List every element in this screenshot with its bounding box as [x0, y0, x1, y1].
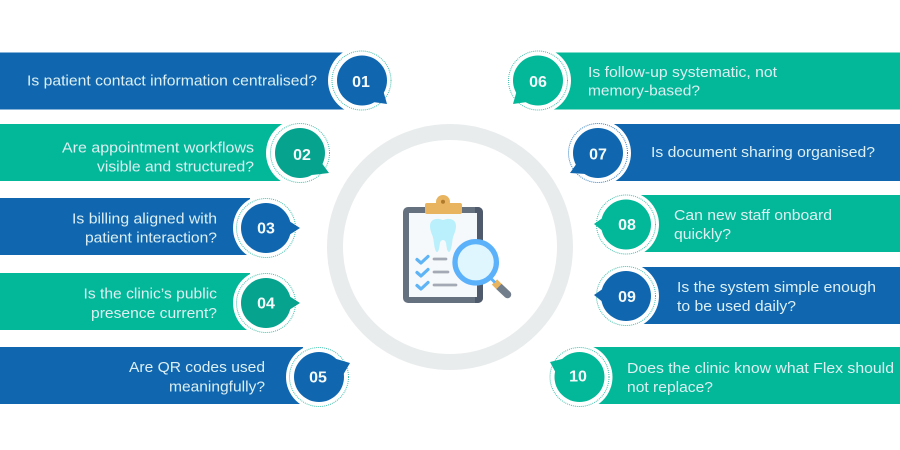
item 04: 04	[257, 296, 275, 312]
item 01: 01	[352, 74, 370, 91]
item 08: Can new staff onboard	[674, 207, 832, 224]
item 06: Is follow-up systematic, not	[588, 64, 778, 81]
item 05	[0, 344, 352, 410]
item 05: Are QR codes used	[129, 359, 265, 376]
item 09: Is the system simple enough	[677, 279, 876, 296]
item 04	[0, 270, 300, 336]
item 09	[593, 263, 900, 329]
item 10	[546, 344, 900, 410]
item 10: not replace?	[627, 379, 713, 396]
item 09: to be used daily?	[677, 298, 796, 315]
item 06: memory-based?	[588, 82, 700, 100]
item 06: 06	[529, 74, 547, 91]
item 01	[0, 46, 396, 114]
item 07: 07	[589, 146, 607, 164]
item 08	[593, 192, 900, 258]
item 02: Are appointment workflows	[62, 140, 254, 156]
icon: clipboard with tooth and magnifier	[403, 195, 508, 303]
item 02	[0, 119, 334, 187]
item 01: Is patient contact information centralised?	[27, 72, 317, 90]
item 02: 02	[293, 147, 311, 164]
item 10: Does the clinic know what Flex should	[627, 360, 894, 377]
item 02: visible and structured?	[97, 158, 254, 176]
item 03: 03	[257, 220, 275, 238]
item 03	[0, 195, 300, 261]
item 09: 09	[618, 289, 636, 306]
item 05: meaningfully?	[169, 378, 265, 396]
item 10: 10	[569, 368, 587, 386]
item 04: Is the clinic’s public	[84, 286, 218, 302]
item 06	[505, 48, 900, 114]
item 03: Is billing aligned with	[72, 210, 217, 228]
item 08: 08	[618, 217, 636, 234]
item 05: 05	[309, 370, 327, 386]
item 08: quickly?	[674, 226, 731, 243]
item 04: presence current?	[91, 305, 217, 322]
item 07: Is document sharing organised?	[651, 144, 875, 161]
central ring	[335, 132, 565, 362]
item 03: patient interaction?	[85, 230, 217, 246]
item 07	[565, 120, 900, 186]
